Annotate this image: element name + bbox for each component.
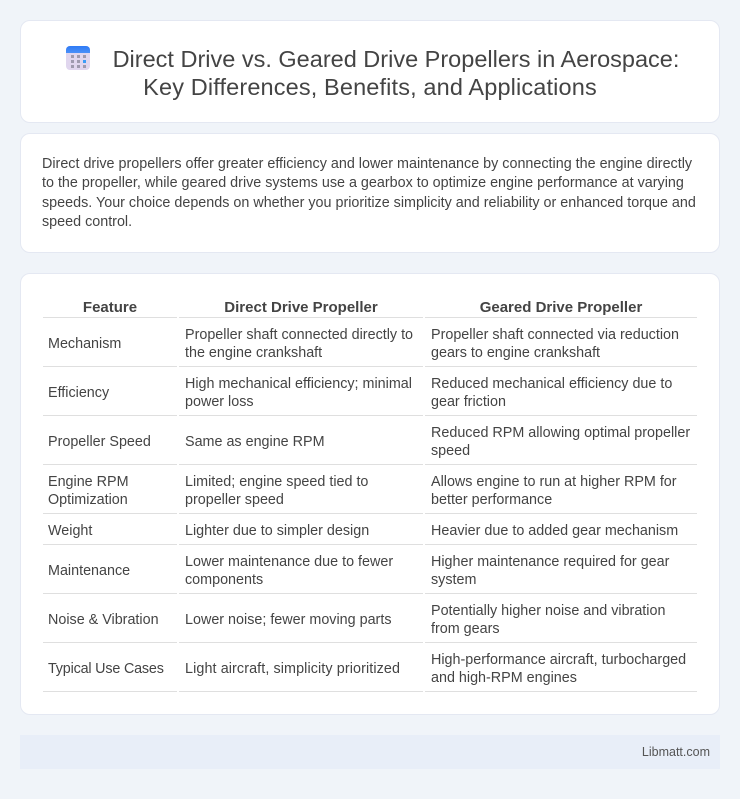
row: propeller speed: Propeller Speed [48,434,151,450]
title [113,46,679,100]
row: typical use cases: Typical Use Cases [48,661,164,677]
row: propeller speed [48,425,690,459]
row: mechanism: gears to engine crankshaft [431,345,600,361]
summary text [42,156,696,230]
row: noise and vibration [48,603,665,637]
title: Direct Drive vs. Geared Drive Propellers in Aerospace: [113,46,679,72]
row: engine rpm optimization [48,474,677,508]
row: engine rpm optimization: propeller speed [185,492,284,508]
row: maintenance: Higher maintenance required for gear [431,554,669,570]
row: weight: Weight [48,523,92,539]
summary text: Direct drive propellers offer greater efficiency and lower maintenance by connecting the engine directly [42,156,692,172]
row: weight [48,523,678,539]
row: efficiency [48,376,672,410]
row: mechanism [48,327,679,361]
row: maintenance: Lower maintenance due to fewer [185,554,393,570]
row: weight: Heavier due to added gear mechanism [431,523,678,539]
footer bar [20,735,720,769]
summary text: to the propeller, while geared drive systems use a gearbox to optimize engine performance at varying [42,175,684,191]
row: maintenance: Maintenance [48,563,130,579]
row: mechanism: Mechanism [48,336,121,352]
row: efficiency: Efficiency [48,385,109,401]
row: propeller speed: Reduced RPM allowing optimal propeller [431,425,690,441]
row: engine rpm optimization: better performance [431,492,552,508]
row: mechanism: Propeller shaft connected directly to [185,327,413,343]
row: engine rpm optimization: Optimization [48,492,128,508]
row: typical use cases: and high-RPM engines [431,670,577,686]
row: maintenance: system [431,572,476,588]
row: efficiency: gear friction [431,394,506,410]
row: mechanism: Propeller shaft connected via reduction [431,327,679,343]
row: noise and vibration: Potentially higher noise and vibration [431,603,665,619]
row: maintenance [48,554,670,588]
table header [83,299,642,316]
row: engine rpm optimization: Allows engine to run at higher RPM for [431,474,677,490]
panel: summary [20,133,720,253]
row: efficiency: Reduced mechanical efficiency due to [431,376,672,392]
row: engine rpm optimization: Engine RPM [48,474,129,490]
row: typical use cases [48,652,686,686]
row: mechanism: the engine crankshaft [185,345,322,361]
table header: Feature [83,299,137,316]
footer brand: Libmatt.com [642,745,710,759]
row: typical use cases: Light aircraft, simplicity prioritized [185,661,400,677]
title: Key Differences, Benefits, and Applications [143,74,597,100]
panel: comparison table [20,273,720,715]
row: noise and vibration: Noise & Vibration [48,612,159,628]
panel: title header [20,20,720,123]
row: noise and vibration: from gears [431,621,500,637]
row: engine rpm optimization: Limited; engine speed tied to [185,474,368,490]
row: weight: Lighter due to simpler design [185,523,369,539]
table header: Geared Drive Propeller [480,299,642,316]
row: maintenance: components [185,572,263,588]
summary text: speed control. [42,214,132,230]
summary text: speeds. Your choice depends on whether you prioritize simplicity and reliability or enhanced torque and [42,195,696,211]
row: propeller speed: speed [431,443,470,459]
table header: Direct Drive Propeller [224,299,378,316]
row: noise and vibration: Lower noise; fewer moving parts [185,612,392,628]
icon: calendar [66,46,90,70]
row: efficiency: power loss [185,394,254,410]
row: typical use cases: High-performance aircraft, turbocharged [431,652,686,668]
row: propeller speed: Same as engine RPM [185,434,325,450]
row: efficiency: High mechanical efficiency; minimal [185,376,412,392]
